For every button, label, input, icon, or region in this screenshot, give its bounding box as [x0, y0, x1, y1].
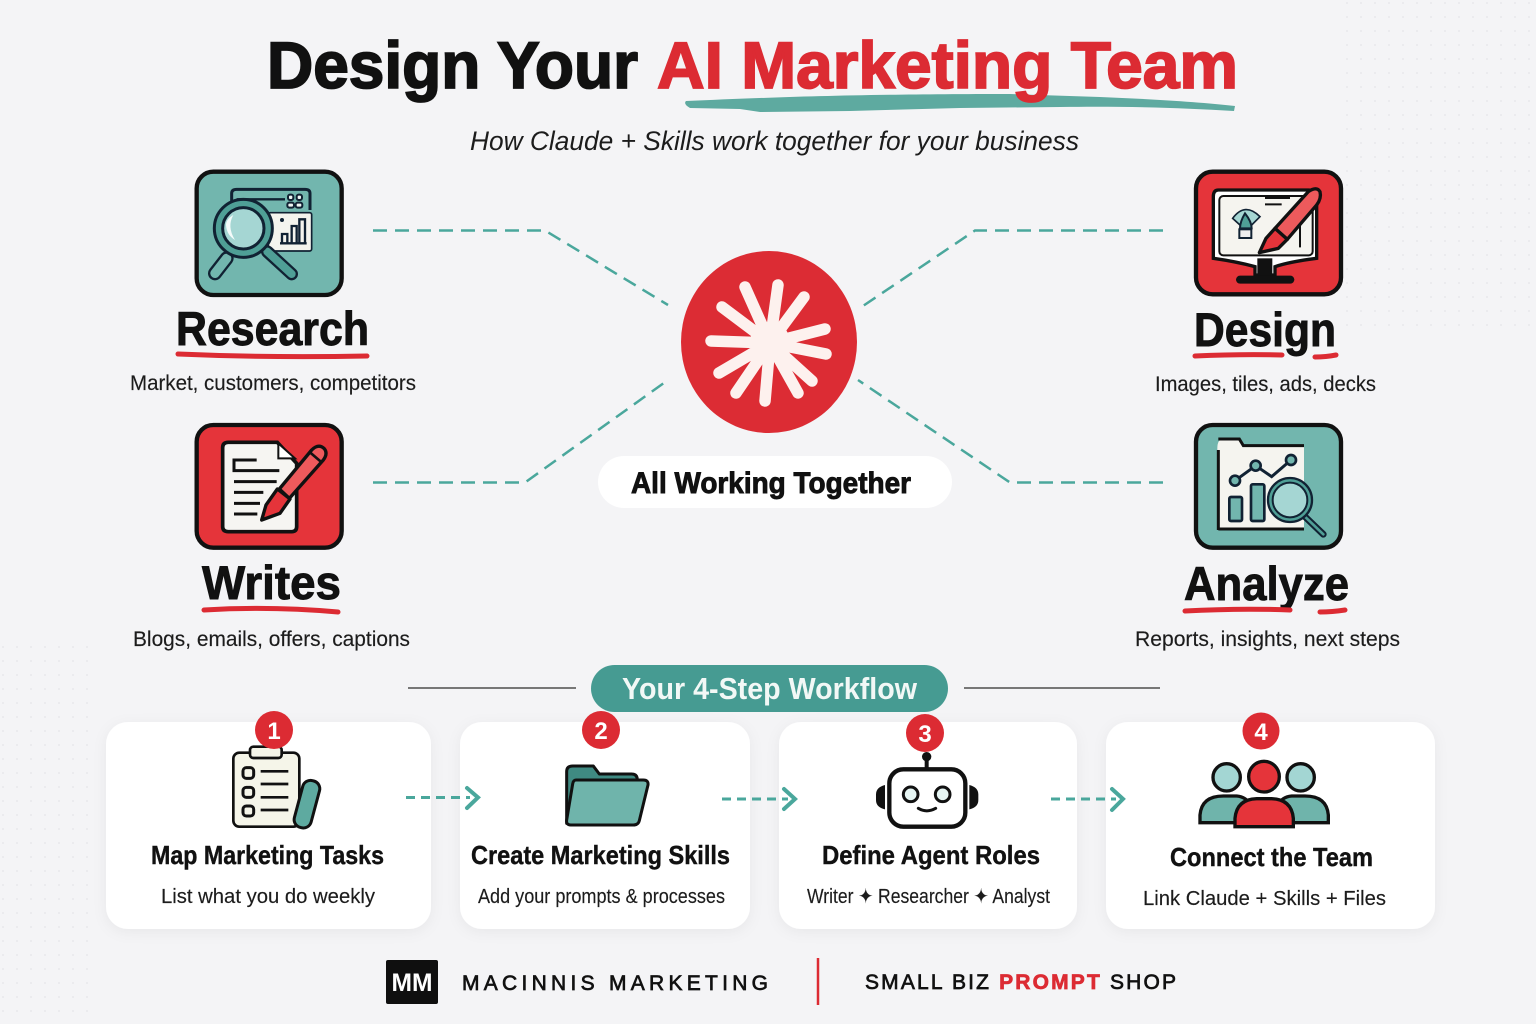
logo: MM: MM — [392, 969, 432, 997]
step 4 description: Link Claude + Skills + Files — [1143, 888, 1386, 910]
step 3 description: Writer ✦ Researcher ✦ Analyst — [807, 886, 1050, 908]
central hub: Claude burst — [681, 251, 857, 433]
step card 3 — [779, 714, 1077, 929]
subtitle: How Claude + Skills work together for your business — [470, 126, 1079, 156]
icon: robot — [876, 752, 978, 827]
title: Design Your — [267, 28, 638, 102]
title — [267, 28, 1238, 112]
title: AI Marketing Team — [657, 28, 1238, 102]
panel: analyze — [1135, 425, 1400, 651]
badge 3 — [906, 714, 944, 752]
workflow heading pill — [591, 665, 948, 712]
icon: document and pen — [197, 425, 342, 548]
icon: monitor and pen — [1196, 172, 1341, 294]
description: design: Images, tiles, ads, decks — [1155, 373, 1376, 396]
badge 3: 3 — [918, 721, 932, 748]
icon: chart folder and magnifier — [1196, 425, 1341, 548]
step card 1 — [106, 711, 431, 929]
badge 1: 1 — [267, 718, 281, 745]
connector: writes to hub — [373, 380, 668, 482]
step card 4 — [1106, 712, 1435, 929]
heading: analyze: Analyze — [1184, 557, 1349, 610]
title underline swoosh — [685, 94, 1235, 112]
badge 2: 2 — [594, 718, 608, 745]
footer — [386, 958, 1176, 1005]
logo: MM — [386, 960, 438, 1004]
icon: magnifier over dashboard — [197, 172, 342, 295]
panel: research — [130, 172, 416, 395]
brand name: MACINNIS MARKETING — [462, 972, 768, 995]
connector: analyze to hub — [858, 380, 1163, 482]
heading: design: Design — [1194, 303, 1336, 356]
badge 4: 4 — [1254, 719, 1268, 746]
arrow: step 1 to 2 — [406, 788, 478, 808]
arrow: step 2 to 3 — [722, 789, 795, 809]
icon: folder — [567, 766, 648, 825]
step 2 description: Add your prompts & processes — [478, 886, 725, 908]
panel: design — [1155, 172, 1376, 396]
badge 4 — [1242, 712, 1280, 750]
icon: team — [1200, 761, 1328, 827]
icon: clipboard — [233, 747, 322, 830]
step 2 title: Create Marketing Skills — [471, 840, 730, 870]
badge 2 — [582, 711, 620, 749]
panel: writes — [133, 425, 410, 651]
step card 2 — [460, 711, 750, 929]
hub label pill: All Working Together — [631, 467, 911, 500]
step 3 title: Define Agent Roles — [822, 840, 1040, 870]
description: writes: Blogs, emails, offers, captions — [133, 628, 410, 651]
description: analyze: Reports, insights, next steps — [1135, 628, 1400, 651]
shop name: SMALL BIZ PROMPT SHOP — [865, 971, 1176, 994]
hub label pill — [598, 456, 952, 508]
heading: writes: Writes — [202, 556, 341, 609]
connector: design to hub — [860, 230, 1163, 308]
step 1 description: List what you do weekly — [161, 886, 375, 908]
heading: research: Research — [176, 302, 369, 355]
description: research: Market, customers, competitors — [130, 372, 416, 395]
step 1 title: Map Marketing Tasks — [151, 840, 384, 870]
workflow heading pill: Your 4-Step Workflow — [622, 671, 918, 706]
connector: research to hub — [373, 230, 668, 305]
badge 1 — [255, 711, 293, 749]
arrow: step 3 to 4 — [1051, 789, 1123, 810]
step 4 title: Connect the Team — [1170, 842, 1373, 872]
